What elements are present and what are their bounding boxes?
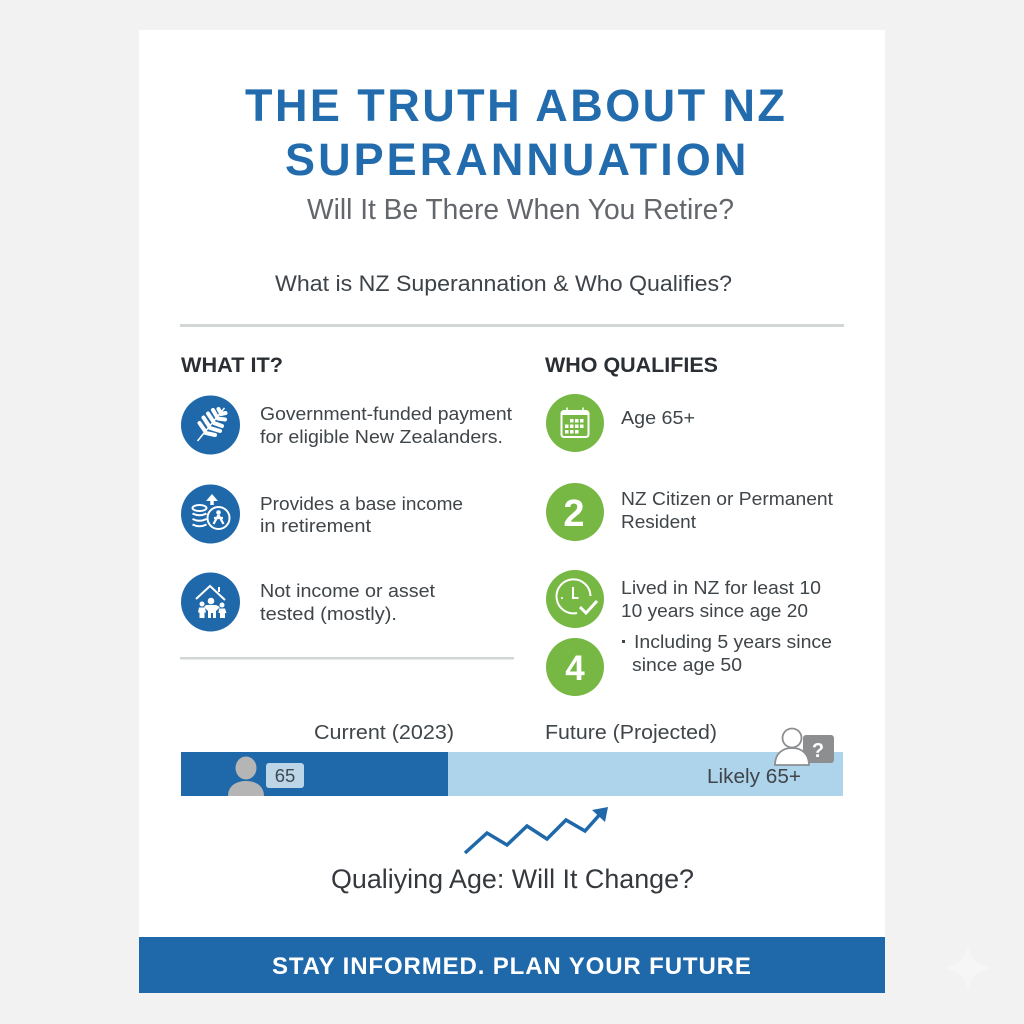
subtitle: Will It Be There When You Retire? bbox=[307, 194, 734, 226]
icon: fern leaf bbox=[181, 396, 240, 454]
icon: future person with question badge bbox=[775, 728, 834, 765]
text: citizen: Resident bbox=[621, 511, 696, 532]
label: future: Future (Projected) bbox=[545, 722, 717, 744]
label: current: Current (2023) bbox=[314, 722, 454, 744]
bar: future segment bbox=[448, 752, 843, 796]
icon: number 2 bbox=[546, 483, 604, 541]
text: citizen bbox=[621, 488, 833, 532]
text: government-funded bbox=[260, 403, 512, 447]
text: base income bbox=[260, 493, 463, 536]
text: lived in NZ: Lived in NZ for least 10 bbox=[621, 577, 821, 598]
heading: what it: WHAT IT? bbox=[181, 354, 283, 377]
icon: house and family bbox=[181, 572, 240, 632]
title: SUPERANNUATION bbox=[285, 134, 749, 185]
section heading: What is NZ Superannation & Who Qualifies? bbox=[275, 271, 732, 296]
icon: future person with question badge: ? bbox=[812, 740, 824, 762]
text: citizen: NZ Citizen or Permanent bbox=[621, 488, 833, 509]
icon: clock with check bbox=[546, 570, 604, 628]
icon: calendar bbox=[546, 394, 604, 452]
chart: qualifying age timeline bbox=[181, 722, 843, 796]
text: age 65: Age 65+ bbox=[621, 407, 695, 428]
title bbox=[245, 80, 787, 185]
text: not income tested: Not income or asset bbox=[260, 580, 435, 601]
icon: number 4 bbox=[546, 638, 604, 696]
panel: what it is bbox=[181, 354, 512, 632]
panel: white card bbox=[139, 30, 885, 993]
text: including 5 years: Including 5 years since bbox=[634, 631, 832, 652]
text: lived in NZ: 10 years since age 20 bbox=[621, 600, 808, 621]
text: including 5 years: since age 50 bbox=[632, 654, 742, 675]
text: not income tested: tested (mostly). bbox=[260, 603, 397, 624]
text: government-funded: for eligible New Zealanders. bbox=[260, 426, 503, 447]
text: including 5 years bbox=[622, 631, 832, 675]
footer banner bbox=[139, 937, 885, 993]
icon: coins and retiree bbox=[181, 484, 240, 544]
icon: sparkle watermark bbox=[945, 945, 991, 991]
arrow: rising trend bbox=[465, 807, 608, 853]
title: THE TRUTH ABOUT NZ bbox=[245, 80, 787, 131]
icon: current person bbox=[228, 756, 264, 796]
text: not income tested bbox=[260, 580, 435, 624]
icon: number 2: 2 bbox=[563, 493, 585, 535]
heading: who qualifies: WHO QUALIFIES bbox=[545, 354, 718, 377]
text: qualifying age question: Qualiying Age: Will It Change? bbox=[331, 864, 694, 894]
text: base income: in retirement bbox=[260, 515, 371, 536]
badge: 65 bbox=[266, 763, 304, 788]
text: government-funded: Government-funded payment bbox=[260, 403, 512, 424]
badge: 65: 65 bbox=[275, 765, 295, 786]
label: likely 65+: Likely 65+ bbox=[707, 766, 801, 788]
panel: who qualifies bbox=[545, 354, 833, 696]
footer banner: STAY INFORMED. PLAN YOUR FUTURE bbox=[272, 953, 752, 980]
icon: number 4: 4 bbox=[565, 649, 585, 688]
bar: current segment bbox=[181, 752, 448, 796]
text: base income: Provides a base income bbox=[260, 493, 463, 514]
text: lived in NZ bbox=[621, 577, 821, 621]
